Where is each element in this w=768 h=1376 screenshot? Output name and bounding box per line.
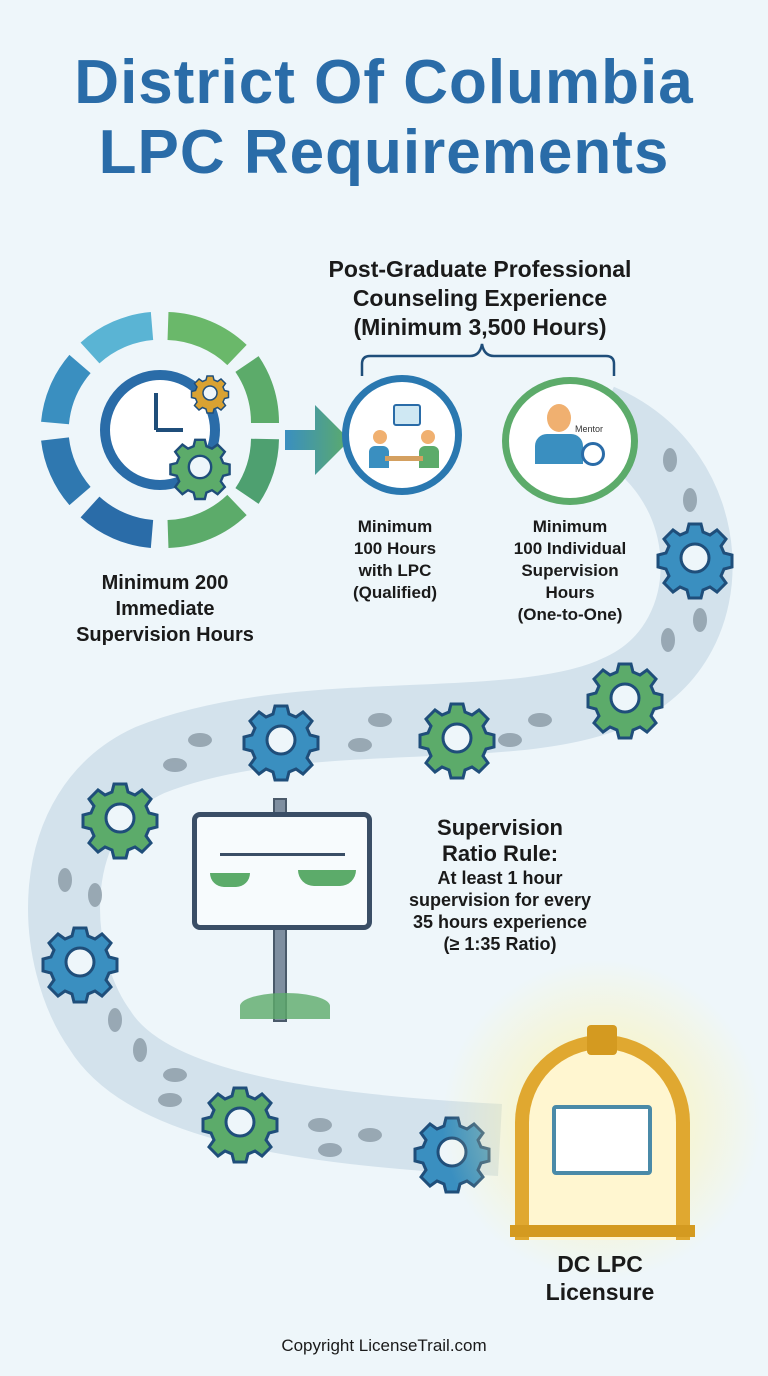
heading: post-graduate experience: Counseling Experience	[353, 285, 607, 311]
title: LPC Requirements	[99, 118, 669, 187]
label: 100 individual supervision: (One-to-One)	[518, 605, 622, 624]
label: 100 hours with LPC: Minimum	[358, 517, 432, 536]
text: supervision ratio rule: supervision for every	[409, 890, 591, 910]
text: supervision ratio rule: 35 hours experience	[413, 912, 587, 932]
label: DC LPC licensure	[546, 1251, 654, 1305]
text: supervision ratio rule: Ratio Rule:	[442, 841, 558, 866]
text: supervision ratio rule: Supervision	[437, 815, 563, 840]
heading: post-graduate experience: Post-Graduate Professional	[329, 256, 631, 282]
label: 100 hours with LPC: with LPC	[359, 561, 431, 580]
label: 100 individual supervision	[514, 517, 626, 624]
label: 100 hours with LPC: (Qualified)	[353, 583, 437, 602]
label: 200 immediate supervision	[76, 572, 254, 646]
label: 200 immediate supervision: Supervision Hours	[76, 624, 254, 646]
title: District Of Columbia	[74, 48, 694, 117]
heading: post-graduate experience: (Minimum 3,500 Hours)	[353, 314, 607, 340]
text: supervision ratio rule: At least 1 hour	[437, 868, 563, 888]
title	[74, 48, 694, 187]
label: DC LPC licensure: DC LPC	[557, 1251, 643, 1277]
brace	[360, 344, 616, 376]
icon: mentor circle: Mentor	[575, 424, 603, 434]
label: DC LPC licensure: Licensure	[546, 1279, 654, 1305]
label: 100 hours with LPC: 100 Hours	[354, 539, 436, 558]
gears	[658, 524, 732, 598]
label: 200 immediate supervision: Minimum 200	[102, 572, 228, 594]
label: 100 hours with LPC	[353, 517, 437, 602]
label: 100 individual supervision: Minimum	[533, 517, 607, 536]
footer: Copyright LicenseTrail.com	[281, 1336, 487, 1355]
path band	[64, 420, 697, 1140]
text: supervision ratio rule	[409, 815, 591, 954]
text: supervision ratio rule: (≥ 1:35 Ratio)	[444, 934, 556, 954]
glow	[442, 960, 762, 1280]
label: 100 individual supervision: Hours	[545, 583, 595, 602]
label: 100 individual supervision: Supervision	[521, 561, 619, 580]
icon: mentor circle	[502, 377, 638, 505]
label: 200 immediate supervision: Immediate	[116, 598, 214, 620]
icon: clock wheel	[41, 312, 344, 548]
icon: golden arch with certificate	[510, 1025, 695, 1240]
heading: post-graduate experience	[329, 256, 631, 340]
icon: meeting circle	[342, 375, 462, 495]
label: 100 individual supervision: 100 Individual	[514, 539, 626, 558]
icon: sign with scale	[192, 798, 372, 1022]
